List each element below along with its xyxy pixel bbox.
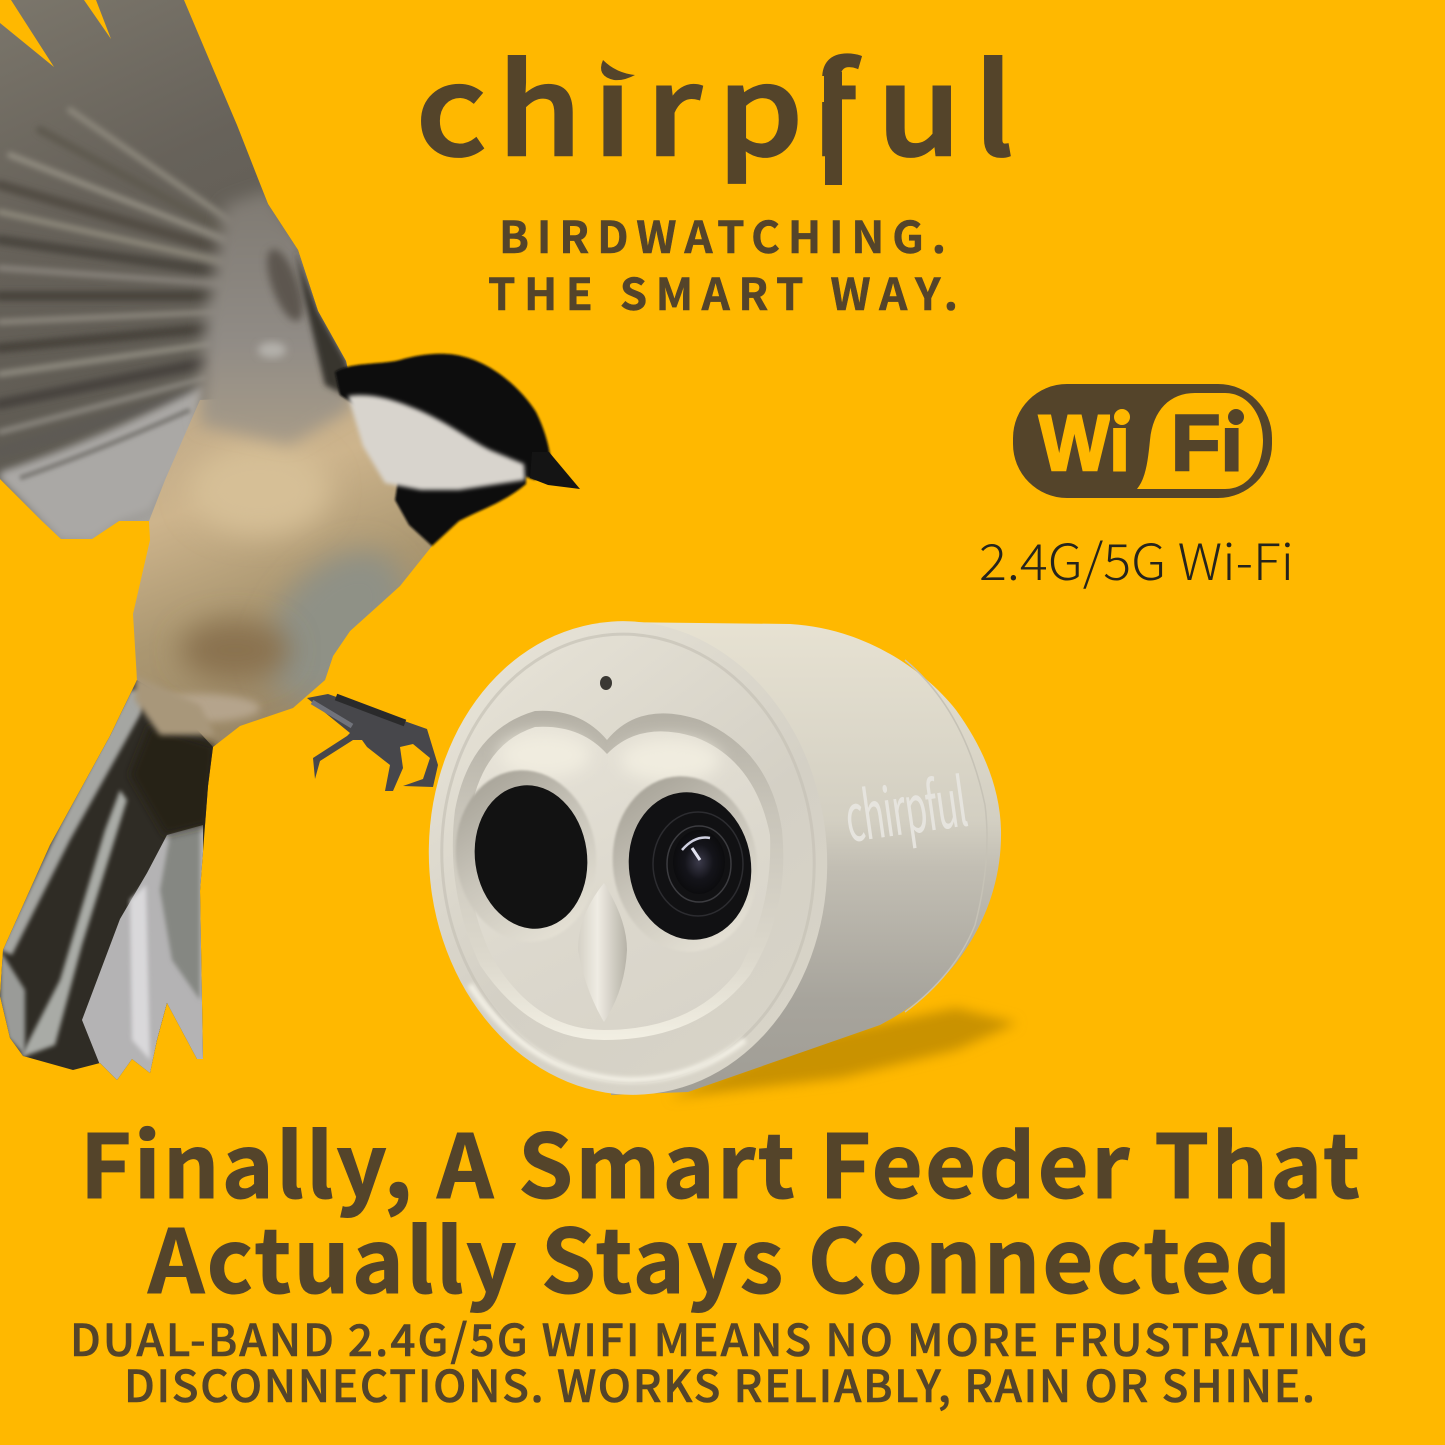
bird foot <box>307 694 438 791</box>
tagline <box>488 202 958 323</box>
camera side logo: chirpful <box>838 750 973 862</box>
icon: Wi-Fi logo: Fi <box>1171 398 1243 487</box>
headline: Finally, A Smart Feeder That <box>80 1097 1360 1224</box>
bird tail <box>0 680 213 1085</box>
logo long f stem <box>825 72 842 185</box>
icon: Wi-Fi logo <box>1013 384 1272 498</box>
icon: Wi-Fi logo: Wi <box>1039 398 1130 487</box>
bird photo: chickadee <box>0 0 580 1085</box>
camera rim inner lip <box>427 622 829 1094</box>
subheading: DISCONNECTIONS. WORKS RELIABLY, RAIN OR SHINE. <box>124 1351 1315 1415</box>
camera owl face disc <box>453 711 783 1040</box>
logo dot mask <box>596 44 632 82</box>
bird black throat <box>395 470 526 546</box>
bird tail base blend <box>130 675 215 835</box>
headline: Actually Stays Connected <box>147 1192 1291 1319</box>
bird shoulder <box>200 190 360 445</box>
camera right eye socket <box>601 767 769 961</box>
bird white cheek <box>348 395 525 490</box>
subheading <box>70 1305 1368 1415</box>
bird wing <box>0 0 355 539</box>
camera shadow <box>670 1008 1017 1098</box>
camera left eye socket <box>445 761 607 951</box>
headline <box>80 1097 1360 1319</box>
camera lens <box>619 784 761 948</box>
bird body <box>133 375 432 747</box>
bird beak <box>530 452 580 489</box>
camera microphone hole <box>600 676 612 690</box>
bird black cap <box>335 354 552 480</box>
tagline: THE SMART WAY. <box>488 259 958 323</box>
Wi-Fi caption: 2.4G/5G Wi-Fi <box>979 523 1294 595</box>
camera left sensor <box>466 778 596 936</box>
camera beak <box>578 883 627 1022</box>
tagline: BIRDWATCHING. <box>499 202 946 266</box>
camera front rim <box>413 608 843 1108</box>
camera body seam <box>905 660 987 1012</box>
logo bird-wing swoosh over the i <box>601 60 635 80</box>
camera body <box>611 622 1001 1095</box>
logo f crossbar mask <box>808 76 824 102</box>
owl camera product <box>413 608 1001 1108</box>
logo: chirpful wordmark: chirpful <box>416 11 1014 191</box>
camera rim lower highlight <box>470 985 745 1080</box>
subheading: DUAL-BAND 2.4G/5G WIFI MEANS NO MORE FRUSTRATING <box>70 1305 1368 1369</box>
